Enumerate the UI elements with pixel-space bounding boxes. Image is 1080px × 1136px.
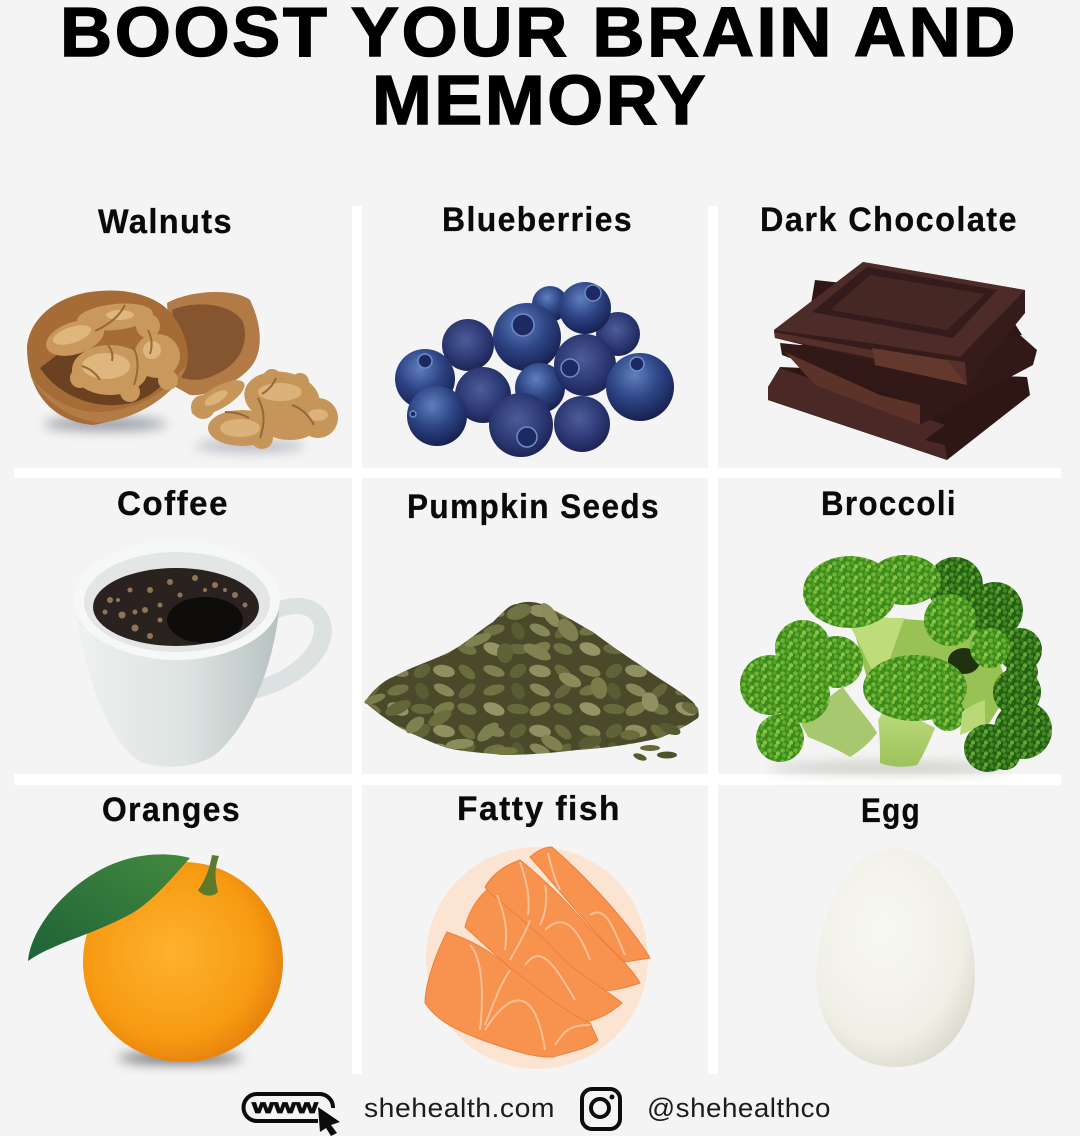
icon: egg: [816, 848, 975, 1067]
icon: website www: [244, 1094, 340, 1136]
icon: coffee cup: [74, 540, 332, 767]
text: instagram handle: @shehealthco: [647, 1093, 831, 1123]
panel: walnuts: [27, 203, 338, 451]
panel: broccoli: [740, 485, 1052, 773]
panel: fatty fish: [425, 790, 650, 1069]
label: oranges: Oranges: [102, 791, 241, 829]
panel: coffee: [74, 485, 332, 767]
label: broccoli: Broccoli: [821, 485, 957, 523]
text: website: shehealth.com: [364, 1093, 555, 1123]
grid dividers: [14, 206, 1061, 1074]
label: egg: Egg: [861, 792, 921, 830]
title: MEMORY: [372, 61, 708, 139]
panel: oranges: [28, 791, 283, 1063]
label: pumpkin seeds: Pumpkin Seeds: [407, 488, 660, 526]
title: [60, 0, 1018, 139]
icon: pumpkin seed pile: [363, 600, 700, 762]
label: fatty fish: Fatty fish: [457, 790, 621, 828]
icon: salmon slices: [425, 847, 650, 1069]
panel: egg: [816, 792, 975, 1067]
panel: pumpkin seeds: [363, 488, 700, 762]
label: coffee: Coffee: [117, 485, 229, 523]
icon: website www: www: [251, 1097, 318, 1118]
label: walnuts: Walnuts: [98, 203, 233, 241]
icon: instagram: [582, 1089, 620, 1129]
footer: [244, 1089, 831, 1136]
label: dark chocolate: Dark Chocolate: [760, 201, 1018, 239]
icon: broccoli: [740, 555, 1052, 773]
icon: blueberries: [395, 282, 674, 457]
icon: orange: [28, 854, 283, 1063]
icon: dark chocolate: [768, 262, 1037, 460]
icon: walnuts: [27, 291, 338, 451]
panel: dark chocolate: [760, 201, 1037, 460]
label: blueberries: Blueberries: [442, 201, 633, 239]
panel: blueberries: [395, 201, 674, 457]
